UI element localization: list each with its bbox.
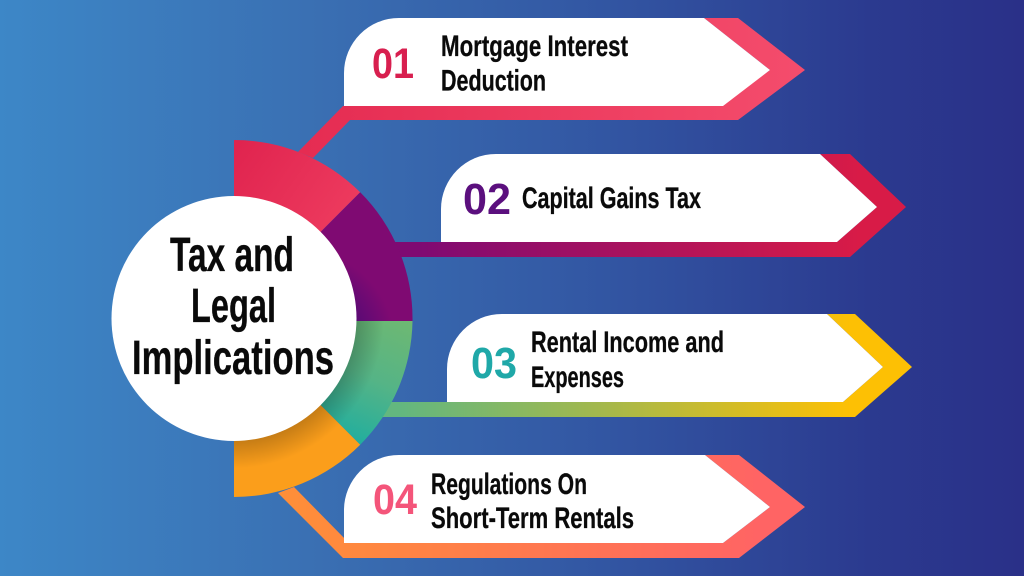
number 03: 03 [471,339,517,388]
label: Mortgage Interest Deduction [441,30,628,98]
title: Tax and Legal Implications: Tax and [170,229,294,282]
label: Rental Income and Expenses [531,326,724,394]
arrow 4 white body [344,455,770,543]
arrow 1 white body [344,18,770,106]
number 01: 01 [372,40,414,88]
label: Regulations On Short-Term Rentals [431,468,634,535]
segmented ring [234,140,413,497]
ring segment: green [320,321,412,445]
arrow 1 coloured frame and connector [298,18,805,158]
title: Tax and Legal Implications: Implications [132,332,334,385]
ring purple inner shadow [320,192,413,321]
arrow 3: Rental Income and Expenses [375,314,912,417]
arrow 4 coloured frame and connector [278,455,805,558]
label: Regulations On Short-Term Rentals: Regulations On [431,468,587,501]
number 04: 04 [373,476,417,524]
ring segment: orange [234,405,360,497]
ring segment: red [234,140,360,232]
title: Tax and Legal Implications: Legal [191,280,276,333]
arrow 2: Capital Gains Tax [395,154,906,257]
label: Rental Income and Expenses: Rental Income and [531,326,724,359]
label: Mortgage Interest Deduction: Deduction [441,64,546,98]
label: Mortgage Interest Deduction: Mortgage Interest [441,30,628,63]
label: Capital Gains Tax: Capital Gains Tax [522,182,701,215]
ring segment: purple [320,192,413,321]
ring inner shadow [234,321,412,497]
arrow 4: Regulations On Short-Term Rentals [278,455,805,558]
number 02: 02 [463,175,511,224]
label: Regulations On Short-Term Rentals: Short-Term Rentals [431,502,634,535]
arrow 2 white body [441,154,877,242]
arrow 2 coloured frame and connector [395,154,906,257]
title: Tax and Legal Implications [132,229,334,385]
arrow 3 coloured frame and connector [375,314,912,417]
label: Rental Income and Expenses: Expenses [531,361,624,394]
arrow 1: Mortgage Interest Deduction [298,18,805,158]
arrow 3 white body [447,314,883,402]
circle [112,196,356,441]
central circle with title [112,196,356,441]
